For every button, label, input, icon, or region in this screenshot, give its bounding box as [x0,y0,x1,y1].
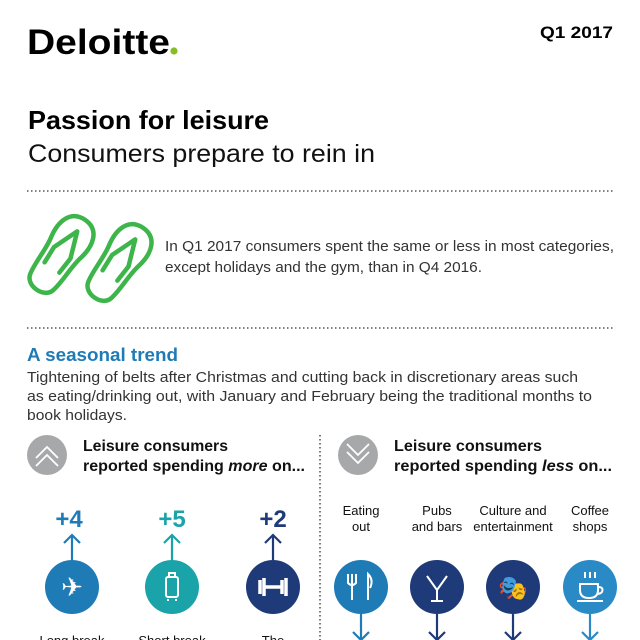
item: culture and entertainment: Culture and [479,503,547,518]
item: pubs and bars [410,503,464,640]
section paragraph: as eating/drinking out, with January and February being the traditional months to [27,389,592,405]
logo: Deloitte: Deloitte [27,23,170,62]
panel: spending more [27,435,305,640]
subtitle: Consumers prepare to rein in [28,140,375,168]
heading: more [83,438,305,475]
heading: more: reported spending more on... [83,458,305,475]
item: short break: +5 [158,506,186,533]
item: eating out: Eating [343,503,379,518]
section paragraph: Tightening of belts after Christmas and cutting back in discretionary areas such [27,370,578,386]
item: culture and entertainment: 🎭 [498,575,528,602]
item: eating out: out [352,519,370,534]
item: the gym [246,506,300,640]
section heading: A seasonal trend: A seasonal trend [27,345,178,365]
section paragraph [27,370,592,424]
item: coffee shops: shops [573,519,608,534]
intro text: In Q1 2017 consumers spent the same or less in most categories, [165,238,614,255]
icon: down chevrons [338,435,378,475]
item: long break [39,506,105,640]
item: eating out [334,503,388,640]
heading: less: Leisure consumers [394,438,542,455]
icon: up chevrons [27,435,67,475]
heading: more: Leisure consumers [83,438,228,455]
item: short break [138,506,206,640]
title: Passion for leisure [28,105,269,135]
item: coffee shops: Coffee [571,503,609,518]
section paragraph: book holidays. [27,408,127,424]
item: the gym: +2 [259,506,287,533]
intro text: except holidays and the gym, than in Q4 2016. [165,259,482,276]
panel: spending less [334,435,617,640]
item: long break: ✈ [61,572,83,602]
intro text [165,238,614,276]
item: pubs and bars: and bars [412,519,463,534]
icon: flip flops [21,209,159,309]
date label: Q1 2017 [540,23,613,42]
item: culture and entertainment: entertainment [473,519,553,534]
item: culture and entertainment [473,503,553,640]
item: coffee shops [563,503,617,640]
item: pubs and bars: Pubs [422,503,452,518]
item: long break: +4 [55,506,83,533]
heading: less: reported spending less on... [394,458,612,475]
heading: less [394,438,612,475]
